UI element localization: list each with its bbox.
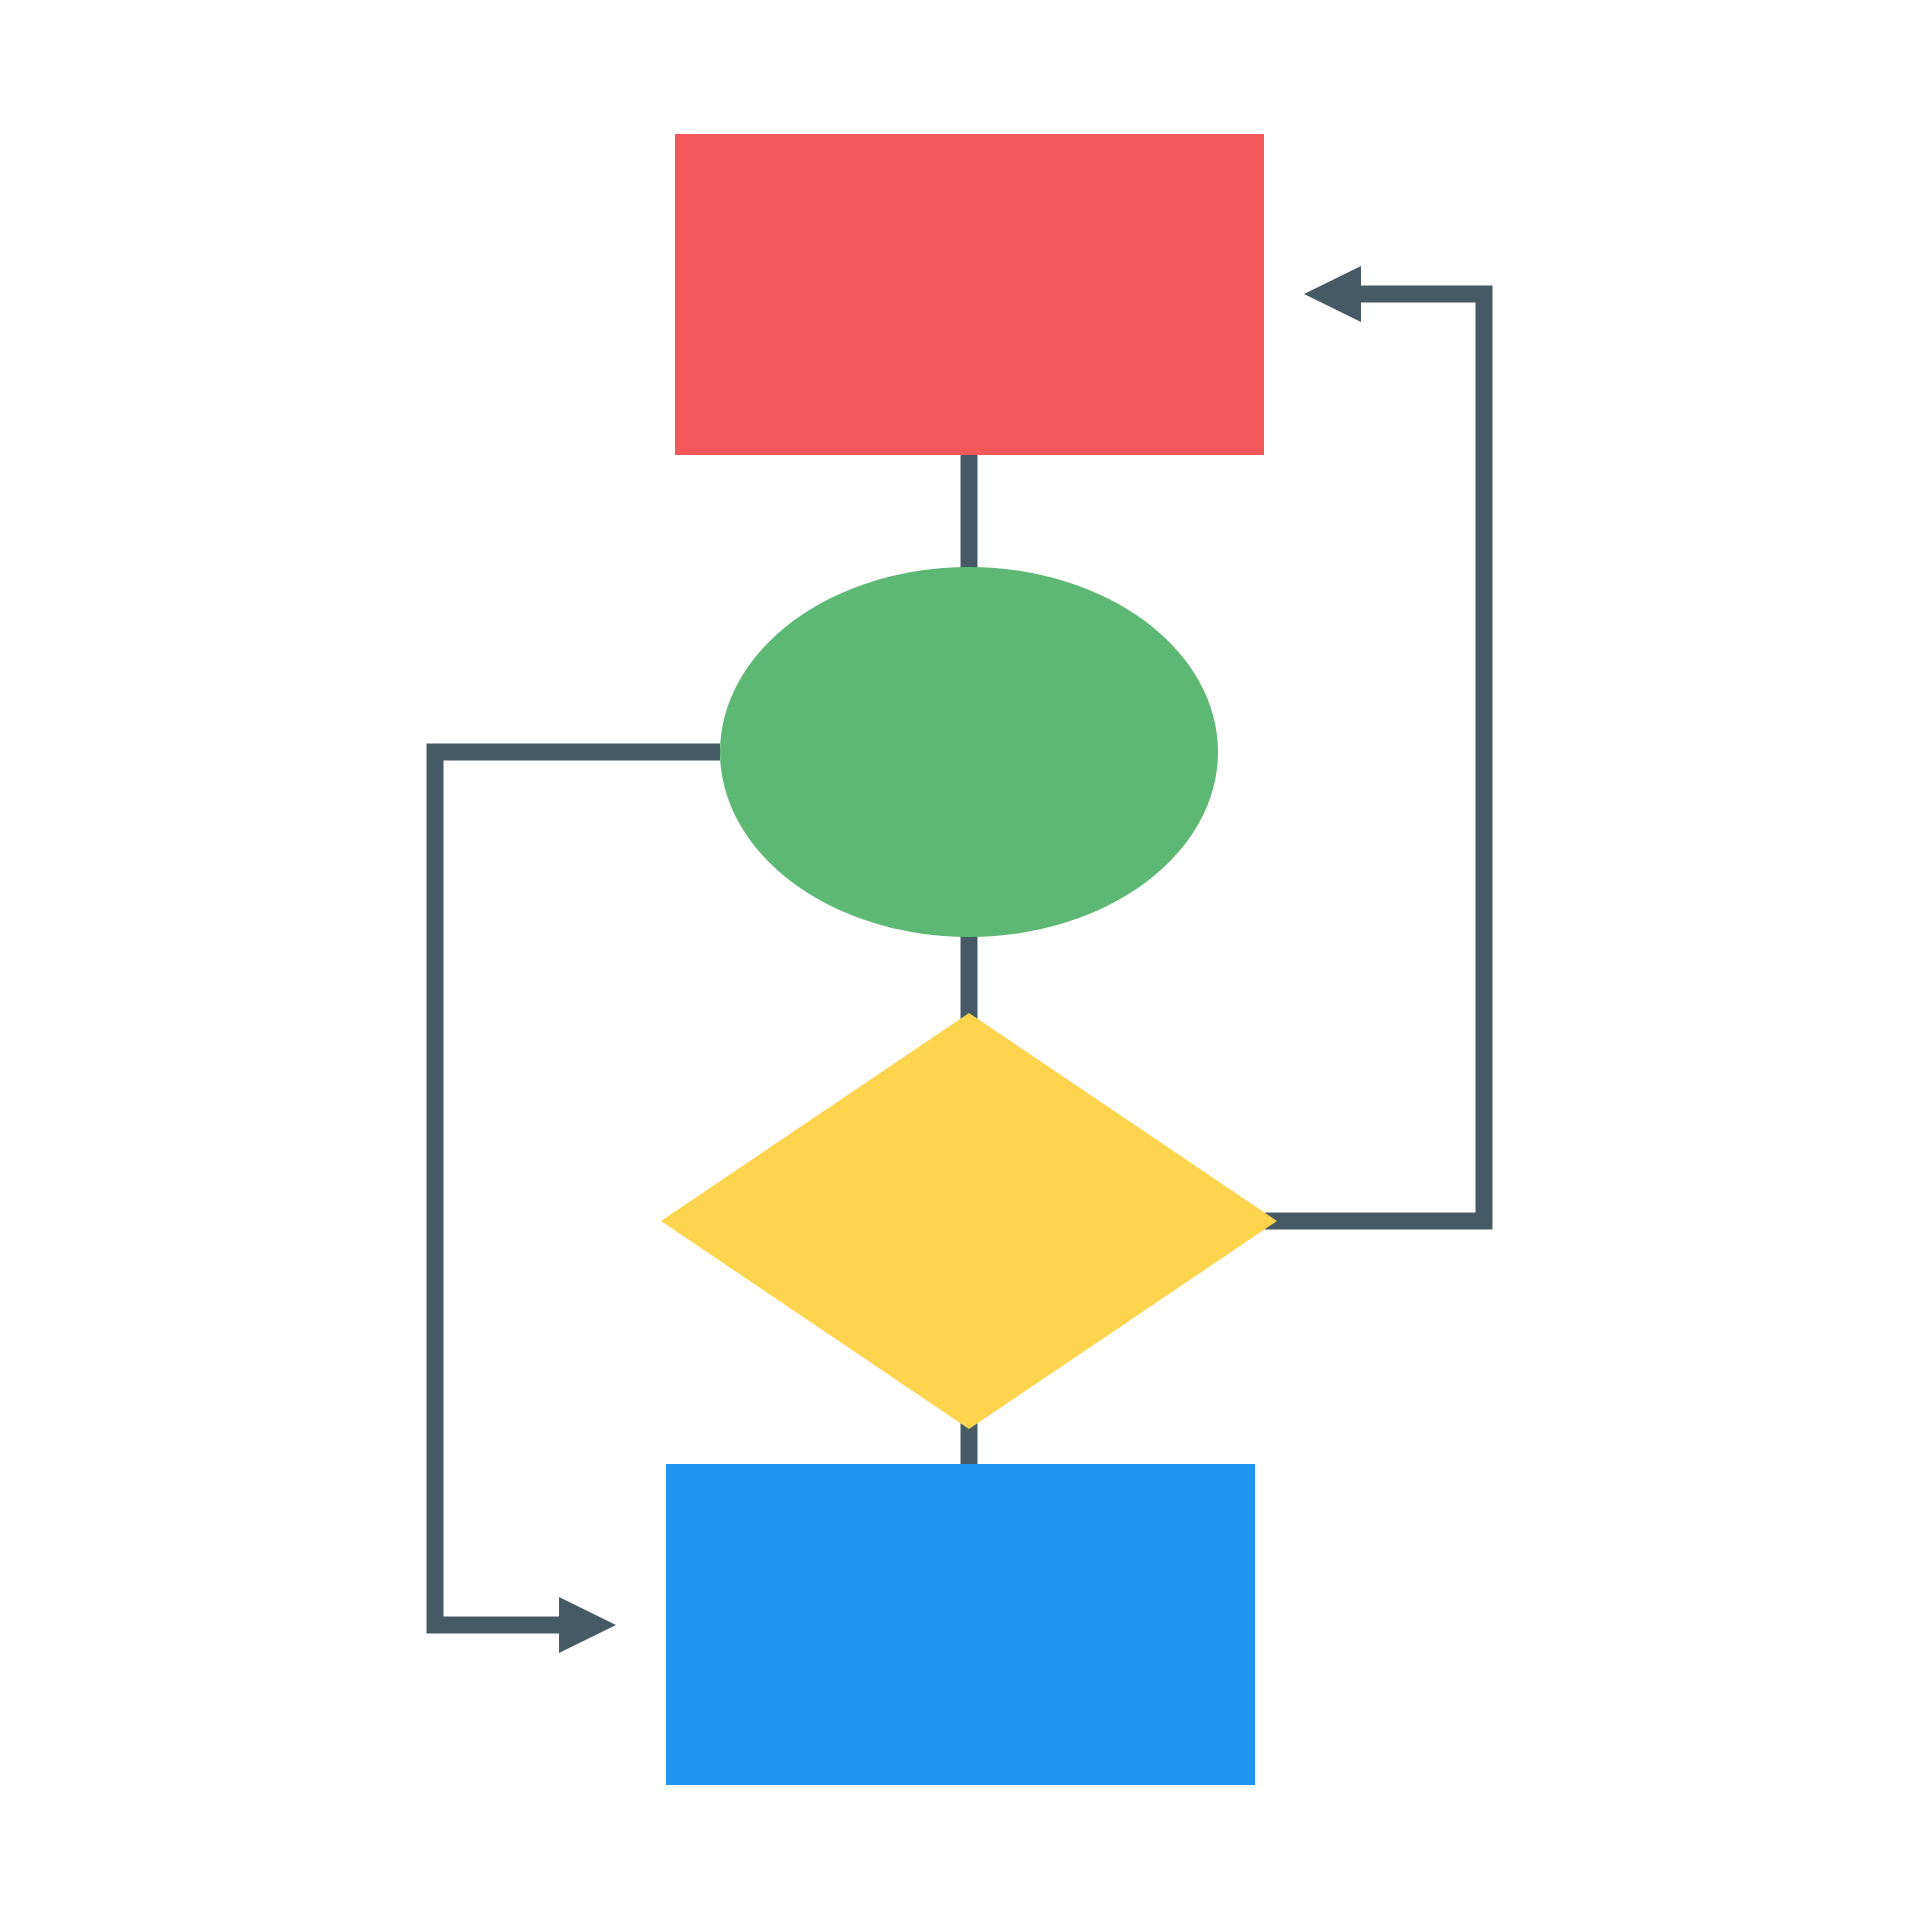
arrow: right loop from diamond to red box: [1250, 266, 1484, 1221]
shape: blue rectangle (end): [666, 1464, 1255, 1785]
shape: red rectangle (start): [675, 134, 1264, 455]
connector: central vertical line: [960, 440, 978, 1480]
arrow: left loop from ellipse to blue box: [435, 752, 720, 1653]
shape: green ellipse (process): [720, 567, 1218, 937]
shape: yellow diamond (decision): [661, 1013, 1277, 1429]
